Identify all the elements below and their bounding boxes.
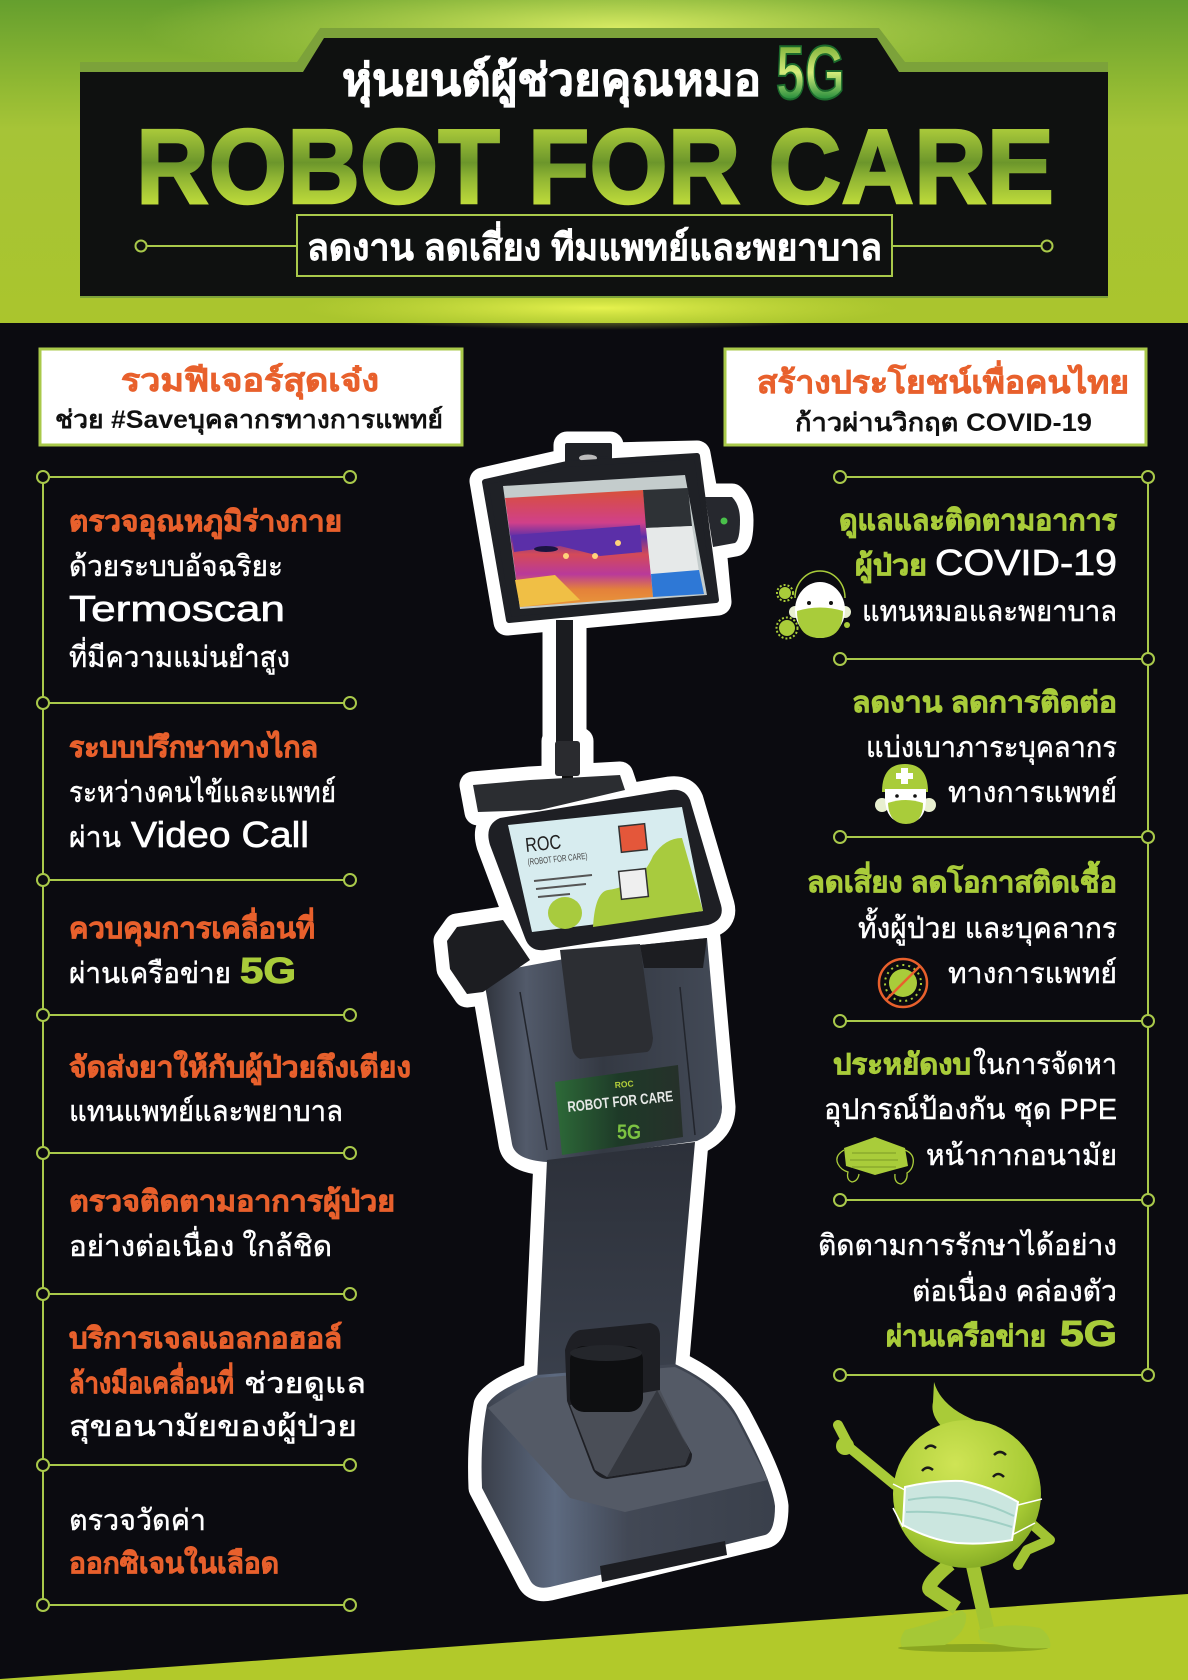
benefit: continuous treatment tracking	[818, 1228, 1117, 1354]
feature: movement control: 5G	[240, 950, 296, 991]
feature: movement control: ผ่านเครือข่าย	[69, 958, 231, 990]
robot white sticker outline	[447, 445, 775, 1588]
benefit: continuous treatment tracking: ผ่านเครือข่าย	[886, 1321, 1046, 1353]
body label: 5G	[617, 1121, 641, 1144]
body label: ROBOT FOR CARE	[567, 1088, 674, 1116]
left column connector lines	[37, 471, 356, 1611]
mascot shadow	[898, 1644, 1048, 1652]
mascot arms	[838, 1425, 895, 1485]
benefit: reduce infection risk: ลดเสี่ยง ลดโอกาสติดเชื้อ	[807, 860, 1117, 899]
benefit: reduce workload	[852, 687, 1117, 809]
benefit: continuous treatment tracking: ต่อเนื่อง คล่องตัว	[912, 1271, 1117, 1308]
benefit: save PPE budget: ประหยัดงบ	[833, 1049, 971, 1081]
icon: patient with viruses	[776, 571, 851, 638]
feature: patient monitoring: อย่างต่อเนื่อง ใกล้ชิด	[69, 1226, 332, 1263]
feature: remote consultation: ระบบปรึกษาทางไกล	[69, 730, 318, 764]
benefit: reduce workload: แบ่งเบาภาระบุคลากร	[866, 732, 1117, 765]
mascot hair	[932, 1382, 985, 1428]
feature: movement control	[69, 907, 315, 991]
feature: alcohol gel: สุขอนามัยของผู้ป่วย	[69, 1411, 357, 1444]
right column connector lines	[834, 471, 1154, 1381]
benefit: save PPE budget	[824, 1047, 1117, 1172]
feature: blood oxygen: ตรวจวัดค่า	[69, 1505, 206, 1537]
feature: patient monitoring	[69, 1186, 395, 1263]
benefit: save PPE budget: หน้ากากอนามัย	[926, 1140, 1117, 1172]
feature: alcohol gel: บริการเจลแอลกอฮอล์	[69, 1321, 342, 1355]
main Thai title: หุ่นยนต์ผู้ช่วยคุณหมอ	[342, 55, 761, 108]
mascot eyes	[922, 1446, 1006, 1477]
top green banner	[0, 0, 1188, 330]
feature: alcohol gel	[69, 1321, 366, 1444]
robot head body	[483, 938, 722, 1162]
header panel	[80, 28, 1108, 298]
mascot mask	[893, 1481, 1042, 1544]
feature: alcohol gel: ช่วยดูแล	[244, 1368, 366, 1401]
icon: no virus	[879, 959, 927, 1007]
lower screen: ROC	[524, 831, 562, 857]
icon: face mask	[837, 1137, 913, 1184]
benefit: monitor COVID patients: แทนหมอและพยาบาล	[862, 596, 1117, 628]
tray	[447, 920, 530, 994]
feature: body temperature: ที่มีความแม่นยำสูง	[69, 637, 290, 675]
subtitle box: ลดงาน ลดเสี่ยง ทีมแพทย์และพยาบาล	[307, 221, 882, 268]
feature: movement control: ควบคุมการเคลื่อนที่	[69, 907, 315, 946]
benefit: monitor COVID patients: ผู้ป่วย	[855, 550, 927, 583]
benefit: reduce infection risk: ทางการแพทย์	[948, 957, 1117, 990]
feature: body temperature: Termoscan	[69, 588, 285, 629]
benefit: reduce infection risk: ทั้งผู้ป่วย และบุคลากร	[858, 907, 1117, 946]
right benefits text	[807, 505, 1117, 1354]
benefit: save PPE budget: อุปกรณ์ป้องกัน ชุด PPE	[824, 1093, 1117, 1127]
feature: blood oxygen: ออกซิเจนในเลือด	[69, 1546, 279, 1580]
benefit: save PPE budget: ในการจัดหา	[973, 1047, 1117, 1081]
benefit: monitor COVID patients	[839, 505, 1117, 628]
body label	[555, 1065, 683, 1155]
body label: ROC	[614, 1078, 634, 1090]
lower screen	[488, 790, 722, 950]
left heading box	[40, 349, 462, 445]
benefit: continuous treatment tracking: 5G	[1060, 1313, 1117, 1354]
benefit: monitor COVID patients: COVID-19	[935, 542, 1117, 583]
mascot	[836, 1382, 1050, 1652]
left heading box: รวมฟีเจอร์สุดเจ๋ง	[121, 363, 379, 400]
base	[482, 1323, 775, 1588]
top tablet	[485, 445, 740, 620]
robot illustration	[447, 445, 775, 1588]
right heading box	[725, 349, 1146, 445]
5G title badge: 5G	[776, 31, 845, 116]
subtitle box	[136, 215, 1052, 276]
benefit: reduce workload: ทางการแพทย์	[948, 776, 1117, 809]
benefit: reduce workload: ลดงาน ลดการติดต่อ	[852, 687, 1117, 719]
pole	[555, 620, 580, 791]
mascot head	[893, 1420, 1041, 1568]
benefit: continuous treatment tracking: ติดตามการรักษาได้อย่าง	[818, 1228, 1117, 1262]
benefit: monitor COVID patients: ดูแลและติดตามอาการ	[839, 505, 1117, 538]
feature: alcohol gel: ล้างมือเคลื่อนที่	[69, 1362, 234, 1400]
mascot legs	[929, 1564, 987, 1628]
column	[537, 1142, 695, 1380]
feature: remote consultation: Video Call	[131, 814, 309, 855]
lower screen: (ROBOT FOR CARE)	[527, 851, 588, 867]
feature: patient monitoring: ตรวจติดตามอาการผู้ป่วย	[69, 1186, 395, 1219]
left heading box: ช่วย #Saveบุคลากรทางการแพทย์	[55, 405, 443, 436]
left features text	[69, 506, 411, 1580]
feature: body temperature	[69, 506, 342, 675]
thermal image	[505, 490, 653, 607]
feature: body temperature: ด้วยระบบอัจฉริยะ	[69, 551, 283, 583]
feature: blood oxygen	[69, 1505, 279, 1580]
feature: medicine delivery: แทนแพทย์และพยาบาล	[69, 1095, 343, 1128]
feature: medicine delivery: จัดส่งยาให้กับผู้ป่วยถึงเตียง	[69, 1050, 411, 1085]
bracket	[473, 775, 625, 812]
ROBOT FOR CARE title: ROBOT FOR CARE	[136, 108, 1054, 226]
icon: doctor with mask	[875, 764, 936, 824]
right heading box: สร้างประโยชน์เพื่อคนไทย	[757, 360, 1129, 400]
mascot feet	[901, 1610, 966, 1647]
feature: remote consultation	[69, 730, 336, 855]
benefit: reduce infection risk	[807, 860, 1117, 990]
feature: remote consultation: ระหว่างคนไข้และแพทย์	[69, 775, 336, 809]
feature: body temperature: ตรวจอุณหภูมิร่างกาย	[69, 506, 342, 539]
feature: medicine delivery	[69, 1050, 411, 1128]
feature: remote consultation: ผ่าน	[69, 822, 121, 854]
bottom green band	[0, 1594, 1188, 1680]
right heading box: ก้าวผ่านวิกฤต COVID-19	[795, 409, 1092, 437]
